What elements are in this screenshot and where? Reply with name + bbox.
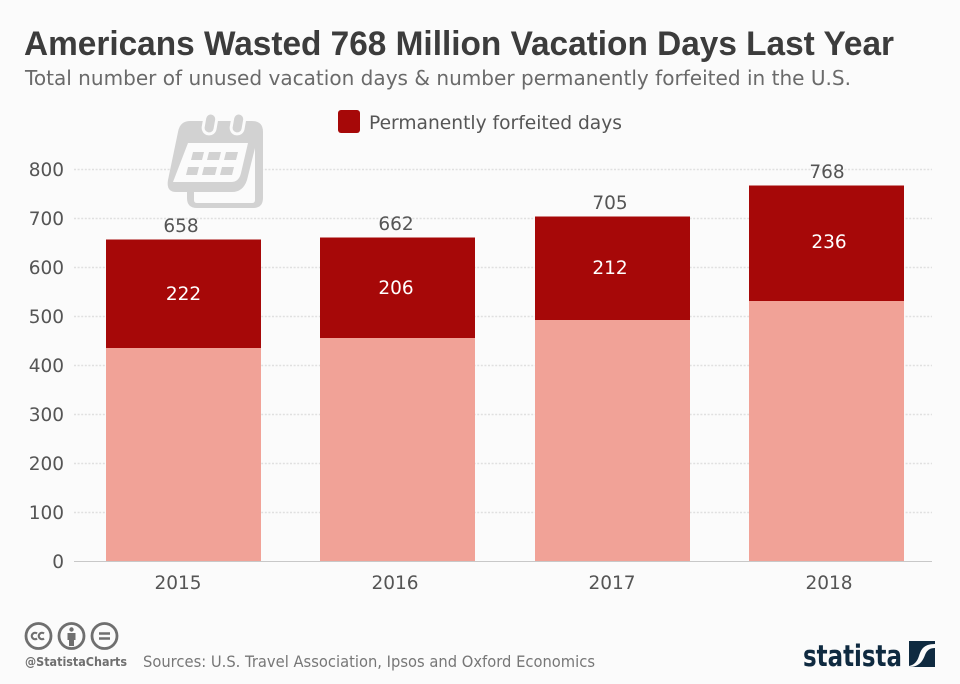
y axis labels — [29, 160, 64, 573]
bar 2018 — [749, 162, 904, 561]
y axis labels: 700 — [29, 209, 64, 230]
statista logo: statista — [803, 639, 902, 673]
y axis labels: 0 — [52, 552, 64, 573]
x axis labels — [154, 573, 853, 594]
title: Americans Wasted 768 Million Vacation Days Last Year — [24, 25, 894, 63]
bar 2016: 662 — [378, 214, 414, 235]
icon: calendar — [168, 112, 263, 208]
bar 2016: 206 — [378, 278, 414, 299]
y axis labels: 500 — [29, 307, 64, 328]
bar 2015: 222 — [166, 284, 201, 305]
bar 2016 — [320, 214, 475, 561]
subtitle: Total number of unused vacation days & number permanently forfeited in the U.S. — [24, 66, 851, 90]
bar 2018: 768 — [809, 162, 845, 183]
bar 2018: 236 — [811, 232, 847, 253]
x axis labels: 2018 — [805, 573, 853, 594]
icon: creative commons licence — [26, 624, 117, 648]
legend: Permanently forfeited days — [369, 112, 622, 134]
source: Sources: U.S. Travel Association, Ipsos and Oxford Economics — [143, 652, 595, 671]
y axis labels: 300 — [29, 405, 64, 426]
y axis labels: 100 — [29, 503, 64, 524]
x axis labels: 2016 — [371, 573, 419, 594]
y axis labels: 200 — [29, 454, 64, 475]
bar 2017 — [535, 193, 690, 561]
bar 2017: 705 — [592, 193, 628, 214]
x axis labels: 2015 — [154, 573, 202, 594]
x axis labels: 2017 — [588, 573, 636, 594]
y axis labels: 600 — [29, 258, 64, 279]
bar 2015 — [106, 216, 261, 561]
social handle: @StatistaCharts — [25, 655, 127, 669]
bar 2017: 212 — [592, 258, 628, 279]
bar 2015: 658 — [163, 216, 199, 237]
y axis labels: 400 — [29, 356, 64, 377]
y axis labels: 800 — [29, 160, 64, 181]
